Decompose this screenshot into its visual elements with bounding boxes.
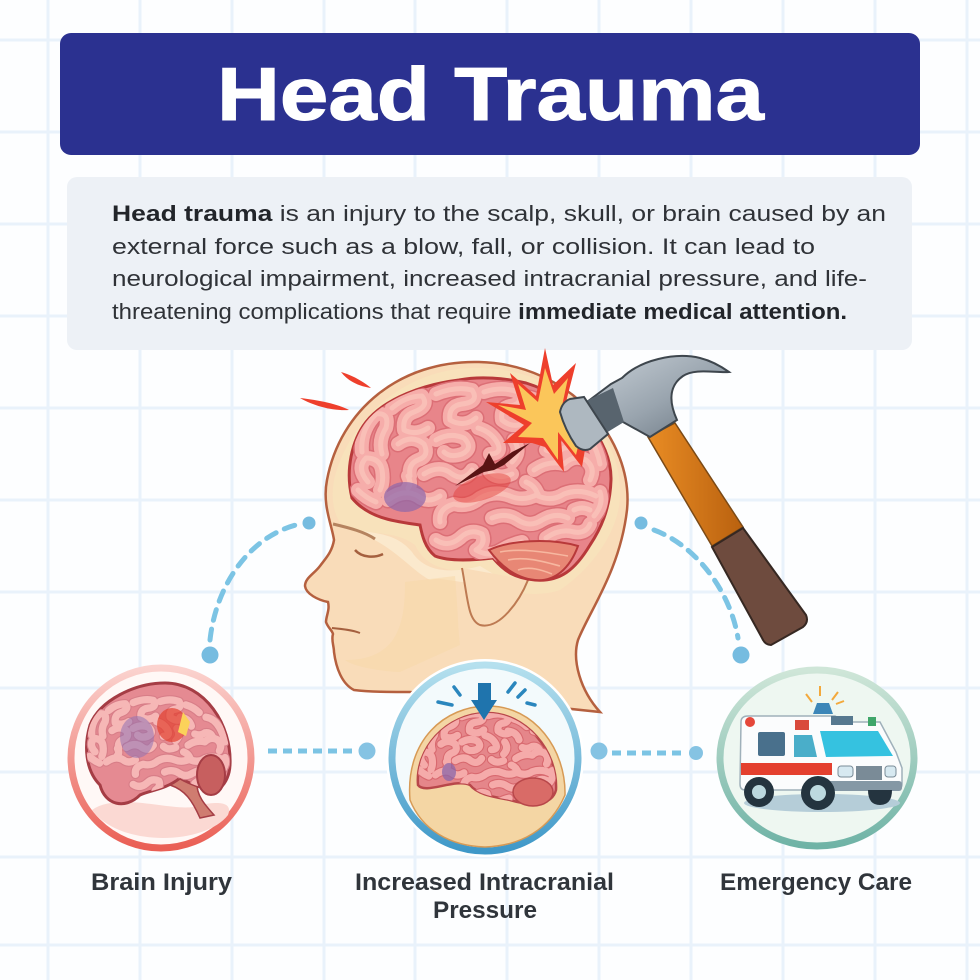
beacon: [813, 703, 833, 714]
label: increased intracranial pressure: [355, 869, 614, 924]
definition text: Head trauma is an injury to the scalp, skull, or brain caused by an: [112, 201, 886, 226]
connector: pressure to emergency care: [590, 742, 703, 760]
skull: [410, 706, 565, 847]
ring: [392, 665, 578, 851]
ring: [71, 668, 251, 848]
hammer: [560, 356, 807, 645]
ring: [720, 670, 914, 846]
label: brain injury: Brain Injury: [91, 869, 233, 896]
wheels: [744, 776, 892, 810]
pressure rays: [438, 683, 535, 705]
head silhouette: [305, 362, 628, 712]
closed eye: [355, 550, 383, 557]
haemorrhage: [450, 467, 514, 509]
cerebellum: [489, 541, 578, 580]
red stripe: [741, 763, 832, 775]
bruise: [384, 482, 426, 512]
panel: emergency care: [720, 670, 914, 846]
bumper: [810, 781, 902, 791]
jaw shading: [345, 576, 460, 672]
injury glow: [157, 708, 187, 742]
connector: head to brain injury: [202, 516, 316, 664]
connector: brain injury to pressure: [268, 742, 376, 760]
definition panel: [67, 177, 912, 350]
mouth: [332, 628, 360, 633]
label: increased intracranial pressure: Increased Intracranial: [355, 869, 614, 896]
bruise: [120, 716, 154, 758]
connector: head to emergency care: [634, 516, 750, 664]
label: emergency care: Emergency Care: [720, 869, 912, 896]
impact starburst: [486, 348, 590, 472]
beacon rays: [806, 686, 844, 704]
white halo: [386, 659, 584, 857]
definition text: external force such as a blow, fall, or collision. It can lead to: [112, 234, 815, 259]
door window: [794, 735, 817, 757]
brain: [418, 713, 556, 806]
ear: [462, 568, 528, 626]
illustration: head with brain: [305, 362, 628, 712]
road shadow: [744, 794, 900, 812]
stem: [170, 776, 214, 818]
grip: [712, 528, 807, 645]
side window: [758, 732, 785, 756]
grille and lamps: [856, 766, 882, 780]
definition text: threatening complications that require immediate medical attention.: [112, 299, 847, 324]
definition text: neurological impairment, increased intracranial pressure, and life-: [112, 266, 867, 291]
panel: increased intracranial pressure: [386, 659, 584, 857]
claw and head: [583, 356, 729, 437]
panel: brain injury: [71, 668, 251, 848]
pressure arrow: [471, 683, 497, 720]
label: increased intracranial pressure: Pressure: [433, 897, 537, 924]
roof markers: [745, 717, 755, 727]
definition text: [112, 201, 886, 324]
impact marks: [300, 372, 371, 410]
windshield: [820, 731, 893, 757]
injured brain: [87, 683, 230, 804]
crack: [455, 443, 530, 486]
handle: [648, 423, 743, 546]
ambulance: [740, 686, 902, 810]
skull base: [345, 528, 500, 583]
bottom tint: [92, 802, 229, 838]
neck: [586, 388, 624, 433]
striking face: [560, 397, 608, 450]
title: Head Trauma: [217, 52, 765, 136]
skull band: [333, 368, 620, 594]
title banner: [60, 33, 920, 155]
eyebrow: [333, 524, 375, 539]
brain: [349, 378, 611, 580]
